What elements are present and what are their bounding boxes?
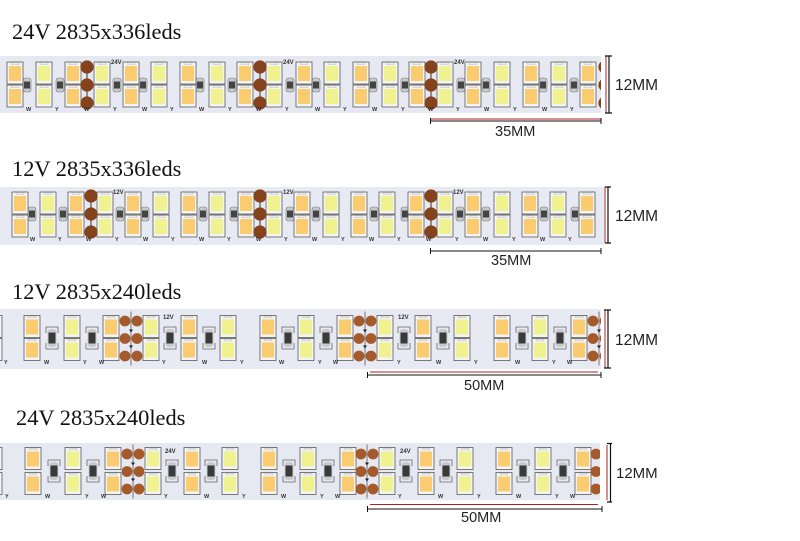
voltage marks [165,448,410,453]
dimension: 50MM length [368,372,601,394]
voltage marks: 12V [113,190,124,196]
resistors [46,327,566,349]
channel marks: WWWWWWWWWW [30,237,546,243]
title: 24V 2835x336leds: 24V 2835x336leds [12,19,181,44]
voltage marks: 24V [283,60,294,66]
dimension: 35MM length [430,118,601,140]
channel marks: WWWWWWWW [45,494,576,500]
channel marks: WWWWWWWW [44,360,573,366]
panel: LED strip 24V 240 [0,443,613,500]
panel: LED strip 24V 336 [0,56,612,113]
solder pads [122,444,613,498]
channel marks: YYYYYYYY [5,494,559,500]
channel marks [26,107,574,111]
dimension: 50MM length: 50MM [464,378,504,394]
voltage marks: 24V [111,60,122,66]
channel marks [4,360,572,364]
resistors [23,78,578,92]
dimension: 12MM height: 12MM [615,77,658,94]
voltage marks [113,190,464,194]
dimension: 12MM height [604,310,658,368]
warm LEDs [12,192,595,237]
title: 12V 2835x240leds: 12V 2835x240leds [12,279,181,304]
solder pads [80,60,612,110]
panel: LED strip 12V 240 [0,309,610,369]
dimension: 12MM height: 12MM [615,208,658,225]
voltage marks: 12V [163,315,174,321]
warm LEDs [25,448,591,494]
warm LEDs [24,316,587,360]
voltage marks: 12V [398,315,409,321]
channel marks: YYYYYYYYYY [58,237,572,243]
solder pads [120,312,610,366]
dimension: 12MM height [605,56,658,113]
dimension: 12MM height [607,444,658,502]
panel: LED strip 12V 336 [0,187,604,245]
warm LEDs [7,62,596,107]
resistors [48,460,569,482]
channel marks [30,237,572,241]
dimension: 12MM height [605,187,658,243]
voltage marks [163,314,408,319]
channel marks: YYYYYYYYYY [55,107,574,113]
voltage marks [111,60,464,64]
dimension: 35MM length: 35MM [495,124,535,140]
dimension: 12MM height: 12MM [615,332,658,349]
dimension: 50MM length: 50MM [461,510,501,526]
channel marks [5,494,576,498]
dimension: 12MM height: 12MM [616,465,658,482]
solder pads [84,189,438,239]
voltage marks: 24V [454,60,465,66]
voltage marks: 24V [400,449,411,455]
cool LEDs [0,448,551,494]
title: 12V 2835x336leds: 12V 2835x336leds [12,156,181,181]
title: 24V 2835x240leds: 24V 2835x240leds [16,405,185,430]
dimension: 35MM length [430,248,601,269]
dimension: 35MM length: 35MM [491,253,531,269]
voltage marks: 24V [165,449,176,455]
channel marks: YYYYYYYY [4,360,556,366]
dimension: 50MM length [368,504,602,526]
cool LEDs [40,192,566,237]
cool LEDs [36,62,567,107]
cool LEDs [0,316,548,360]
resistors [28,207,579,221]
voltage marks: 12V [283,190,294,196]
channel marks: WWWWWWWWWW [26,107,548,113]
voltage marks: 12V [453,190,464,196]
